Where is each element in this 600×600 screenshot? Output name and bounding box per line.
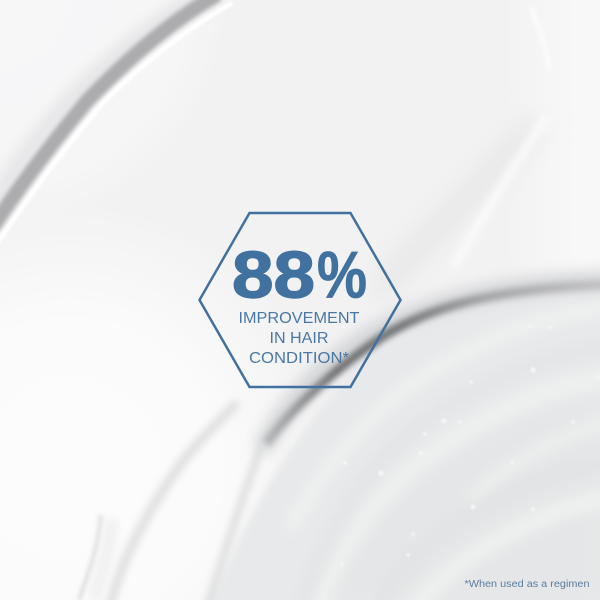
upper-right soft fold xyxy=(385,130,530,285)
white highlight beside crease xyxy=(0,3,232,248)
caption: improvement in hair condition xyxy=(238,310,360,367)
hexagon outline xyxy=(200,213,400,387)
statistic: 88%: 88 xyxy=(232,238,315,312)
lower-left soft folds xyxy=(205,445,262,600)
dark top-left crease xyxy=(0,0,205,205)
caption: improvement in hair condition: IN HAIR xyxy=(270,330,328,347)
soft streaks in swirl xyxy=(290,305,600,600)
caption: improvement in hair condition: CONDITION* xyxy=(249,350,349,367)
statistic: 88% xyxy=(232,238,367,312)
crease above swirl xyxy=(262,280,600,450)
statistic: 88%: % xyxy=(317,238,367,312)
footnote: *When used as a regimen xyxy=(464,578,590,590)
lower-right swirl body xyxy=(205,285,600,600)
caption: improvement in hair condition: IMPROVEMENT xyxy=(238,310,360,327)
cream bubbles xyxy=(340,324,600,566)
